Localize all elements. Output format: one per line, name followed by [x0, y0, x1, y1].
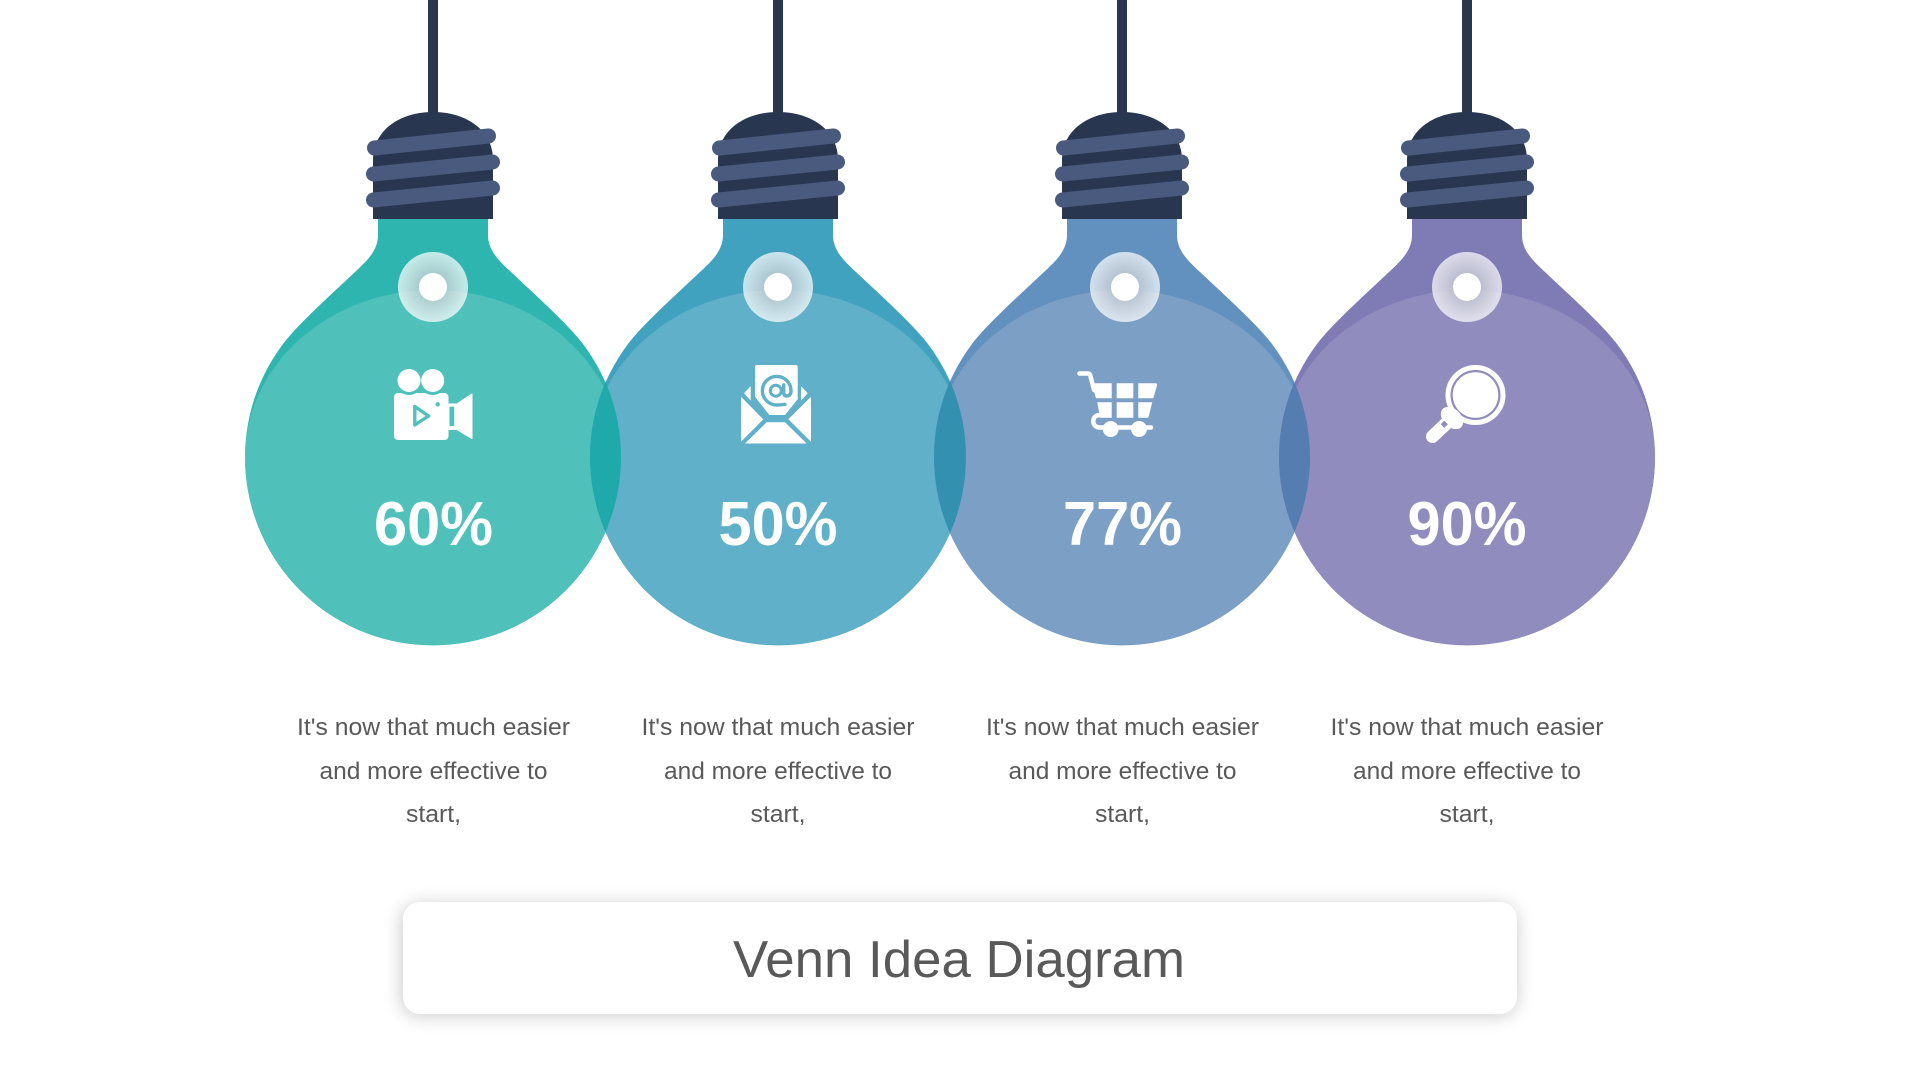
bulb highlight [1279, 290, 1655, 645]
text block 1: It's now that much easier [297, 714, 570, 741]
stat: 60%: 60% [374, 490, 493, 559]
text block 2 [642, 714, 915, 828]
filament [1090, 252, 1160, 322]
cord [428, 0, 438, 116]
lightbulb 2: blue-teal [590, 0, 966, 645]
text block 1: and more effective to [320, 758, 548, 785]
bulb glass [934, 219, 1310, 645]
text block 3: and more effective to [1008, 758, 1236, 785]
text block 2: and more effective to [664, 758, 892, 785]
title panel [401, 902, 1517, 1016]
socket [1062, 112, 1182, 219]
text block 4: It's now that much easier [1330, 714, 1604, 741]
filament [1432, 252, 1502, 322]
bulb glass [245, 219, 621, 645]
icon: video camera [394, 366, 472, 440]
text block 1 [297, 714, 570, 828]
bulb highlight [245, 290, 621, 645]
filament [743, 252, 813, 322]
icon: shopping cart [1080, 374, 1157, 437]
bulb highlight [590, 290, 966, 645]
text block 4 [1330, 714, 1604, 828]
cord [1117, 0, 1127, 116]
socket [373, 112, 493, 219]
bulb glass [590, 219, 966, 645]
overlap 2-3 [934, 381, 966, 532]
text block 3 [986, 714, 1259, 828]
lightbulb 1: teal [245, 0, 621, 645]
bulb glass [1279, 219, 1655, 645]
text block 3: start, [1095, 801, 1150, 828]
text block 3: It's now that much easier [986, 714, 1259, 741]
icon: email envelope [741, 365, 811, 444]
stat: 90%: 90% [1408, 490, 1526, 559]
cord [773, 0, 783, 116]
overlap 3-4 [1279, 382, 1310, 532]
lightbulb 3: steel blue [934, 0, 1310, 645]
text block 4: start, [1440, 801, 1494, 828]
lightbulb 4: purple [1279, 0, 1655, 645]
socket [1407, 112, 1527, 219]
text block 2: It's now that much easier [642, 714, 915, 741]
text block 2: start, [750, 801, 806, 828]
cord [1462, 0, 1472, 116]
filament [398, 252, 468, 322]
stat: 50%: 50% [718, 490, 838, 559]
icon: magnifying glass [1432, 368, 1503, 436]
text block 1: start, [406, 801, 461, 828]
stat: 77%: 77% [1063, 490, 1182, 559]
text block 4: and more effective to [1353, 758, 1581, 785]
overlap 1-2 [590, 382, 621, 532]
bulb highlight [934, 290, 1310, 645]
title: Venn Idea Diagram [733, 931, 1185, 989]
socket [718, 112, 838, 219]
